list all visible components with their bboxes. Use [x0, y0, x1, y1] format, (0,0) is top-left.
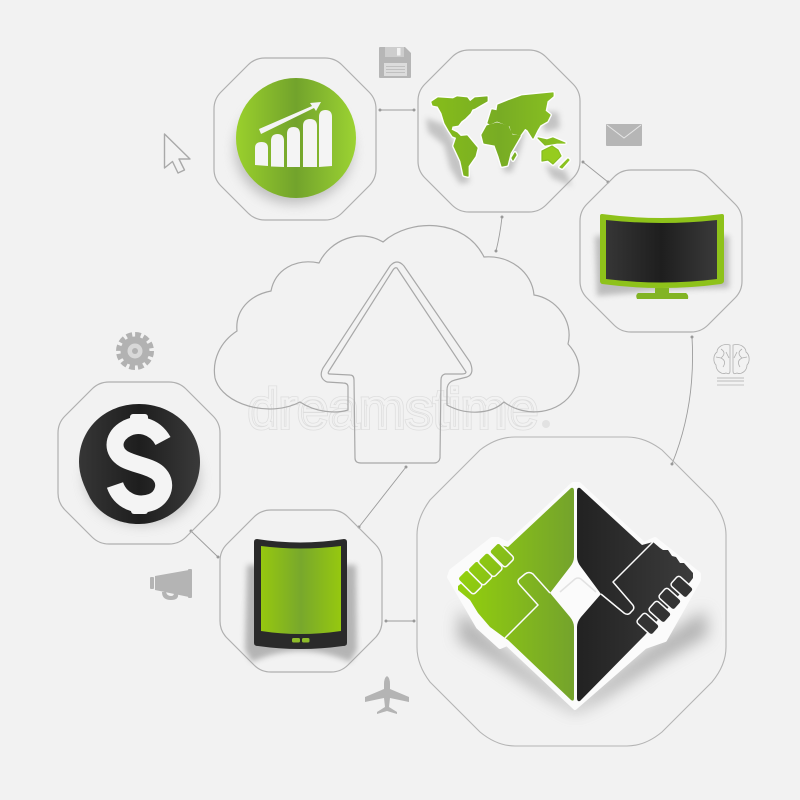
rising bars: [255, 110, 332, 167]
watermark text: dreamstime: [248, 377, 538, 440]
icon: gear: [118, 334, 152, 368]
panel: growth chart: [214, 58, 376, 220]
tablet shadow: [245, 565, 357, 662]
monitor screen: [606, 220, 717, 282]
black fingers: [636, 575, 694, 636]
green thumb outline: [505, 572, 550, 638]
sticker shadow: [235, 96, 353, 204]
tablet body: [254, 539, 347, 649]
black coin: [79, 404, 200, 524]
monitor shadow: [595, 236, 729, 296]
black hand: [577, 488, 694, 701]
panel: world map: [418, 50, 580, 212]
cloud outline: [214, 226, 579, 412]
continents: [432, 93, 569, 176]
cloud with upload arrow: [214, 226, 579, 463]
octagon frame: [220, 510, 382, 672]
green arm and palm: [458, 488, 574, 701]
octagon frame: [58, 382, 220, 544]
green fingers: [457, 542, 515, 595]
octagon frame: [214, 58, 376, 220]
panel: tablet: [220, 510, 382, 672]
icon: envelope: [606, 124, 642, 146]
green disc: [236, 78, 356, 198]
octagon frame: [418, 50, 580, 212]
arrow inner outline: [328, 268, 466, 463]
white sticker: [449, 484, 699, 708]
tablet screen: [261, 546, 341, 634]
icon: dollar symbol: [115, 414, 164, 514]
monitor stand: [636, 288, 688, 299]
monitor frame: [600, 214, 724, 288]
black arm and palm: [577, 488, 693, 701]
panel: curved monitor: [580, 170, 742, 332]
tablet buttons: [292, 638, 310, 642]
icon: floppy disk: [379, 47, 411, 78]
sticker shadow: [458, 610, 708, 712]
icon: megaphone: [150, 569, 192, 600]
coin shadow: [84, 431, 200, 525]
icon: mouse cursor: [164, 134, 190, 173]
watermark text: dreamstime: [248, 377, 538, 440]
map white outline: [432, 93, 569, 176]
panel: dollar sign: [58, 382, 220, 544]
connector arrows: [190, 108, 694, 622]
trend arrow: [259, 102, 321, 134]
icon: airplane: [365, 676, 409, 714]
octagon frame: [417, 437, 726, 746]
green hand: [457, 488, 574, 701]
panel: handshake: [417, 437, 726, 746]
octagon frame: [580, 170, 742, 332]
icon: brain: [714, 345, 749, 385]
black thumb outline: [601, 542, 653, 614]
inner diamond emboss: [560, 578, 596, 592]
map shadow: [426, 112, 572, 186]
